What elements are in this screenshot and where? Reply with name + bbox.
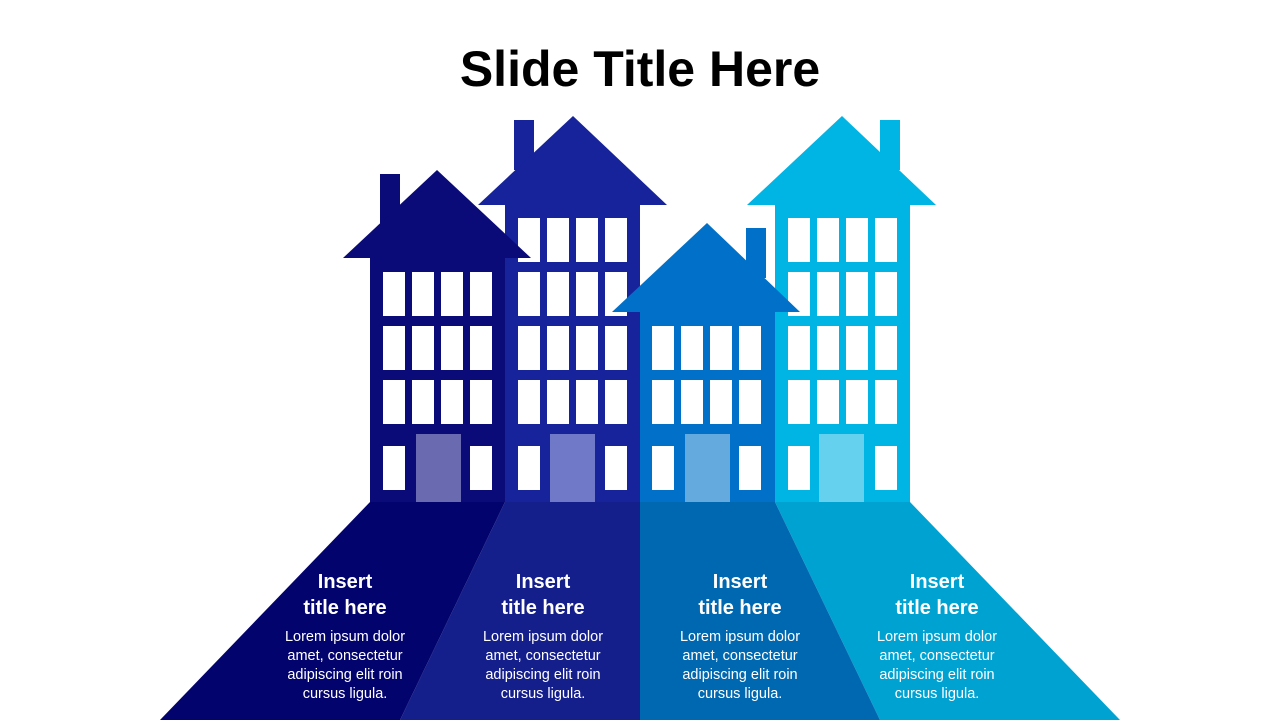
text block 3: title here: [698, 597, 782, 619]
text block 1: Lorem ipsum dolor: [285, 629, 405, 645]
text block 3: Insert: [713, 571, 767, 593]
text block 4: title here: [895, 597, 979, 619]
text block 4: adipiscing elit roin: [879, 667, 995, 683]
text block 4: Insert: [910, 571, 964, 593]
text block 2: cursus ligula.: [501, 686, 585, 702]
text block 2: Lorem ipsum dolor: [483, 629, 603, 645]
text block 2: adipiscing elit roin: [485, 667, 601, 683]
text block 1: adipiscing elit roin: [287, 667, 403, 683]
text block 4: Lorem ipsum dolor: [877, 629, 997, 645]
text block 2: [483, 571, 603, 702]
text block 4: [877, 571, 997, 702]
text block 3: Lorem ipsum dolor: [680, 629, 800, 645]
text block 3: cursus ligula.: [698, 686, 782, 702]
text block 2: title here: [501, 597, 585, 619]
text block 2: amet, consectetur: [485, 648, 601, 664]
text block 4: amet, consectetur: [879, 648, 995, 664]
text block 1: amet, consectetur: [287, 648, 403, 664]
building 4 cyan: [747, 116, 1120, 720]
text block 3: amet, consectetur: [682, 648, 798, 664]
text block 1: [285, 571, 405, 702]
text block 1: title here: [303, 597, 387, 619]
text block 1: cursus ligula.: [303, 686, 387, 702]
building 3 medium blue: [612, 223, 880, 720]
building 2 blue: [400, 116, 667, 720]
text block 3: [680, 571, 800, 702]
text block 2: Insert: [516, 571, 570, 593]
text block 4: cursus ligula.: [895, 686, 979, 702]
title: Slide Title Here: [460, 41, 820, 97]
text block 3: adipiscing elit roin: [682, 667, 798, 683]
building 1 navy: [160, 170, 531, 720]
text block 1: Insert: [318, 571, 372, 593]
